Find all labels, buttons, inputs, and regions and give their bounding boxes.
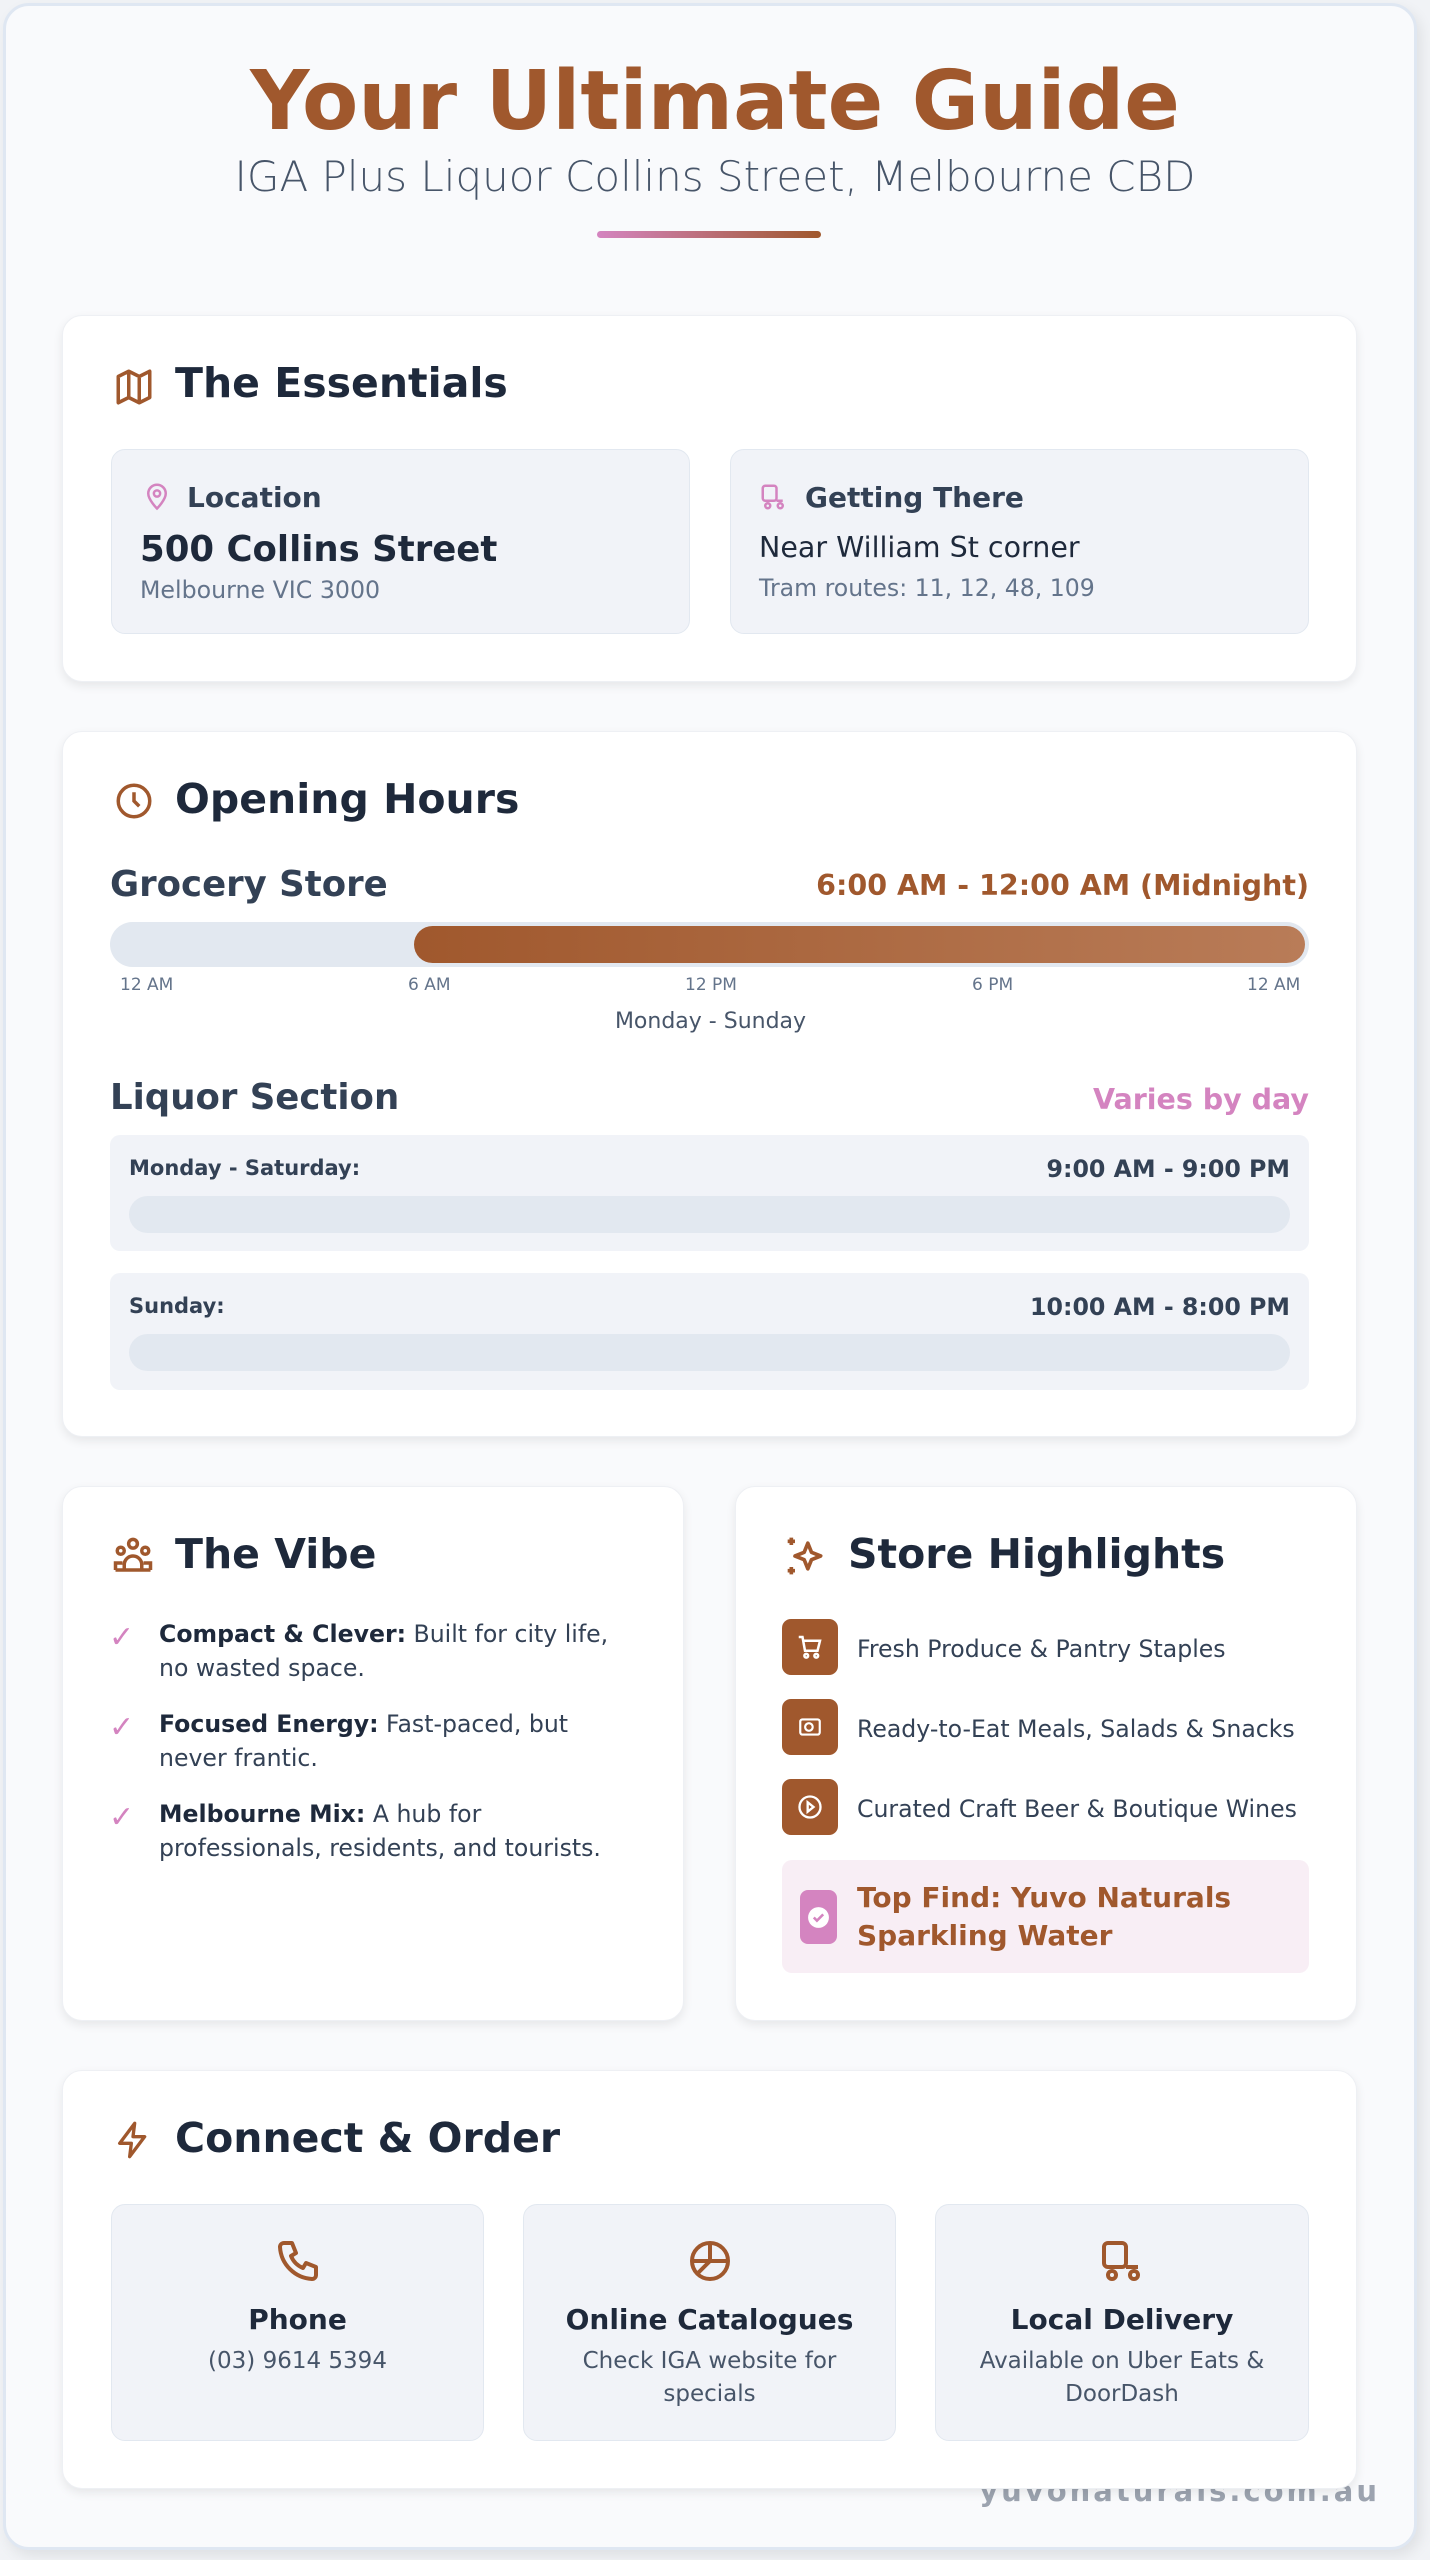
- panel: opening hours: 6 PM: [972, 975, 1013, 995]
- panel: connect & order: [62, 2070, 1357, 2489]
- icon: tram: [762, 484, 784, 510]
- delivery box: Available on Uber Eats & DoorDash: [980, 2348, 1264, 2407]
- getting there box: Tram routes: 11, 12, 48, 109: [759, 574, 1095, 602]
- location box: 500 Collins Street: [140, 529, 497, 570]
- location box: Location: [187, 481, 322, 514]
- panel: opening hours: 12 AM: [1247, 975, 1300, 995]
- liquor row sunday: 10:00 AM - 8:00 PM: [1030, 1293, 1290, 1321]
- liquor row mon-sat: [110, 1135, 1309, 1251]
- divider: [597, 231, 821, 238]
- icon: bolt: [118, 2122, 146, 2158]
- grocery bar: [110, 922, 1309, 967]
- highlight items: Curated Craft Beer & Boutique Wines: [857, 1795, 1297, 1823]
- heading: The Essentials: [175, 359, 508, 407]
- panel: opening hours: 12 PM: [685, 975, 737, 995]
- location box: [111, 449, 690, 634]
- panel: the vibe: [62, 1486, 684, 2021]
- icon: map: [116, 369, 152, 405]
- heading: Connect & Order: [175, 2114, 560, 2162]
- panel: essentials: [62, 315, 1357, 682]
- icon: people: [114, 1538, 152, 1572]
- getting there box: [730, 449, 1309, 634]
- location box: Melbourne VIC 3000: [140, 576, 380, 604]
- callout: top find: Top Find: Yuvo Naturals: [857, 1881, 1231, 1914]
- vibe list: ✓: [109, 1620, 134, 1655]
- vibe list: Melbourne Mix: A hub for professionals, residents, and tourists.: [159, 1800, 601, 1862]
- icon: pin: [147, 484, 167, 510]
- icon: sparkles: [788, 1538, 823, 1574]
- heading: The Vibe: [175, 1530, 376, 1578]
- liquor row mon-sat: 9:00 AM - 9:00 PM: [1046, 1155, 1290, 1183]
- phone box: Phone: [248, 2303, 347, 2336]
- delivery box: [935, 2204, 1309, 2441]
- getting there box: Near William St corner: [759, 531, 1080, 564]
- subtitle: IGA Plus Liquor Collins Street, Melbourne CBD: [235, 152, 1195, 201]
- panel: opening hours: Varies by day: [1093, 1083, 1309, 1116]
- liquor row sunday: [110, 1273, 1309, 1390]
- liquor row sunday: Sunday:: [129, 1294, 225, 1318]
- vibe list: [109, 1620, 608, 1862]
- highlight items: Fresh Produce & Pantry Staples: [857, 1635, 1226, 1663]
- vibe list: ✓: [109, 1800, 134, 1835]
- heading: Opening Hours: [175, 775, 519, 823]
- vibe list: Compact & Clever: Built for city life, no wasted space.: [159, 1620, 608, 1682]
- panel: store highlights: [735, 1486, 1357, 2021]
- panel: opening hours: 6:00 AM - 12:00 AM (Midnight): [816, 869, 1309, 902]
- panel: opening hours: Monday - Sunday: [615, 1009, 806, 1034]
- delivery box: Local Delivery: [1011, 2303, 1233, 2336]
- callout: top find: Sparkling Water: [857, 1919, 1112, 1952]
- phone box: (03) 9614 5394: [208, 2348, 387, 2374]
- vibe list: ✓: [109, 1710, 134, 1745]
- title: Your Ultimate Guide: [250, 54, 1180, 149]
- grocery label: Grocery Store: [110, 864, 388, 905]
- catalogue box: Online Catalogues: [566, 2303, 853, 2336]
- catalogue box: Check IGA website for specials: [583, 2348, 836, 2407]
- panel: opening hours: 6 AM: [408, 975, 451, 995]
- getting there box: Getting There: [805, 481, 1024, 514]
- watermark: yuvonaturals.com.au: [979, 2474, 1380, 2508]
- phone box: [111, 2204, 484, 2441]
- panel: opening hours: [62, 731, 1357, 1437]
- liquor label: Liquor Section: [110, 1077, 399, 1118]
- heading: Store Highlights: [848, 1530, 1225, 1578]
- liquor row mon-sat: Monday - Saturday:: [129, 1156, 360, 1180]
- callout: top find: [782, 1860, 1309, 1973]
- highlight items: Ready-to-Eat Meals, Salads & Snacks: [857, 1715, 1295, 1743]
- icon: clock: [116, 784, 152, 818]
- vibe list: Focused Energy: Fast-paced, but never frantic.: [159, 1710, 568, 1772]
- highlight items: [782, 1619, 1297, 1835]
- catalogue box: [523, 2204, 896, 2441]
- time ticks: 12 AM: [120, 975, 173, 995]
